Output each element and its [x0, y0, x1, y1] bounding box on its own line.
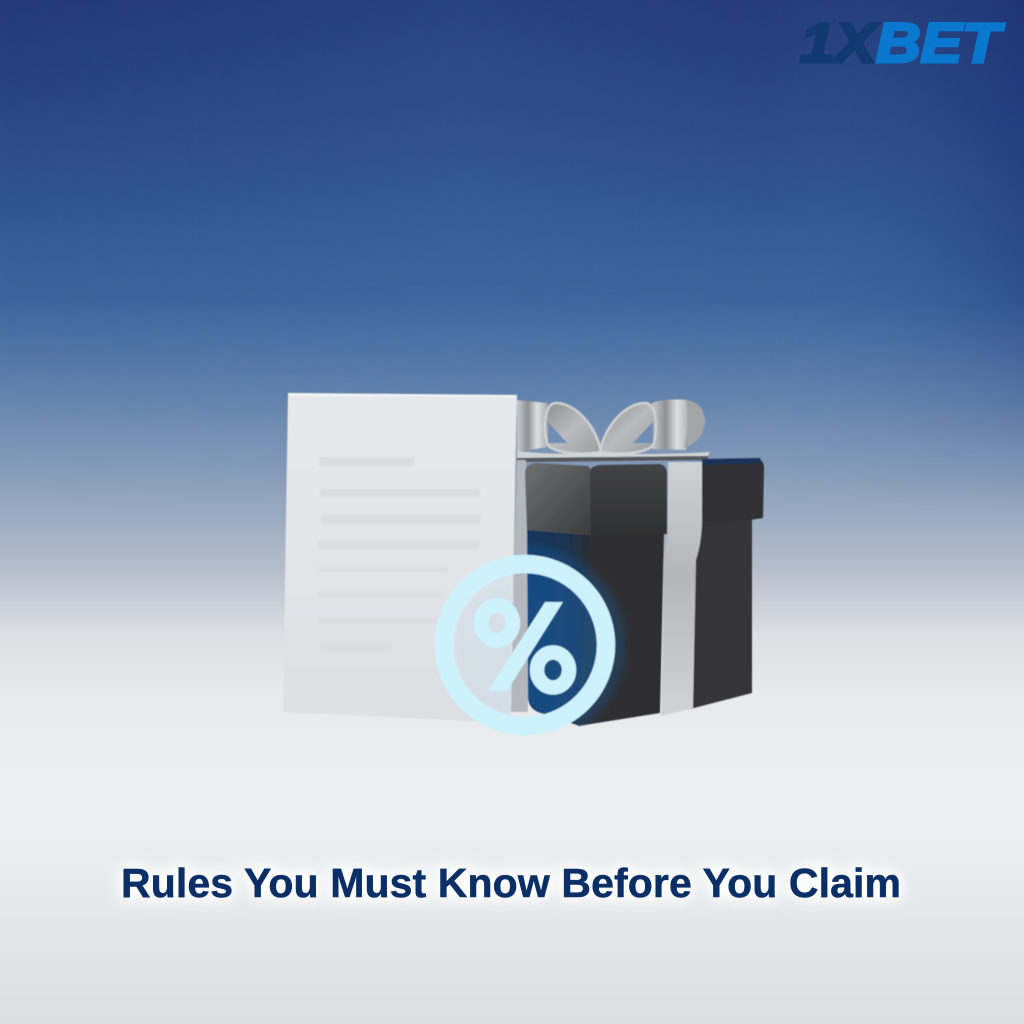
logo: 1XBET: 1X	[800, 11, 880, 74]
title: Rules You Must Know Before You Claim	[121, 860, 901, 906]
title: Rules You Must Know Before You Claim	[121, 860, 901, 906]
gift box ribbon	[661, 462, 702, 716]
percent badge	[444, 564, 606, 726]
logo: 1XBET	[800, 11, 1005, 74]
gift box lid	[525, 458, 764, 536]
gift box body	[510, 459, 753, 727]
gift bow	[517, 399, 710, 462]
document text lines	[318, 457, 481, 651]
illustration: gift box with document and percent badge	[283, 393, 764, 751]
logo: 1XBET: BET	[876, 11, 1005, 74]
document	[283, 393, 517, 723]
